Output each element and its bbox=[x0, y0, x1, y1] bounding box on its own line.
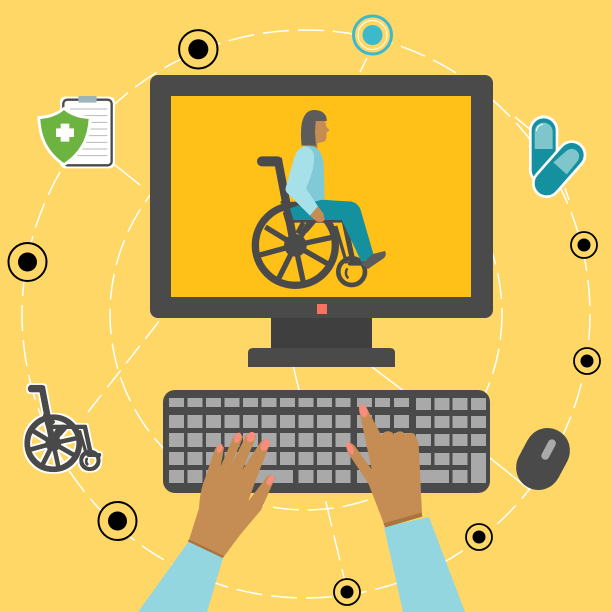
nails bbox=[216, 430, 276, 487]
person on screen bbox=[285, 110, 386, 269]
node: bottom bbox=[334, 579, 360, 605]
node: bottom left bbox=[98, 502, 136, 540]
keyboard bbox=[163, 390, 490, 493]
left hand bbox=[188, 430, 276, 558]
cuff bbox=[383, 513, 422, 527]
icon: pills bbox=[535, 123, 579, 183]
node: right lower bbox=[574, 348, 600, 374]
node: bottom right bbox=[466, 524, 492, 550]
face bbox=[314, 120, 330, 144]
node: left bbox=[8, 243, 46, 281]
left sleeve bbox=[138, 541, 223, 612]
torso bbox=[300, 146, 325, 202]
monitor base bbox=[248, 348, 395, 367]
power button bbox=[317, 304, 327, 314]
pants bbox=[290, 199, 374, 262]
node: right upper bbox=[571, 232, 597, 258]
icon: clipboard with shield bbox=[37, 96, 115, 168]
shoe bbox=[361, 251, 386, 269]
icon: mouse bbox=[508, 420, 578, 498]
monitor stand bbox=[271, 316, 372, 349]
icon: small wheelchair bbox=[27, 387, 99, 469]
palm and fingers bbox=[346, 406, 422, 524]
monitor body bbox=[150, 75, 493, 318]
wheelchair on screen bbox=[255, 158, 366, 285]
monitor bbox=[150, 75, 493, 367]
arm bbox=[285, 146, 318, 216]
cuff bbox=[188, 539, 224, 558]
keys bbox=[169, 398, 486, 483]
node: top teal bbox=[354, 16, 392, 54]
node: top left bbox=[179, 30, 218, 68]
hair bbox=[301, 110, 327, 146]
hand bbox=[310, 206, 325, 222]
screen bbox=[171, 96, 471, 297]
right hand bbox=[344, 403, 422, 527]
neck bbox=[308, 138, 317, 150]
right sleeve bbox=[384, 517, 465, 612]
nails bbox=[344, 403, 369, 456]
upper body and legs bbox=[285, 110, 374, 262]
palm and fingers bbox=[189, 433, 275, 557]
